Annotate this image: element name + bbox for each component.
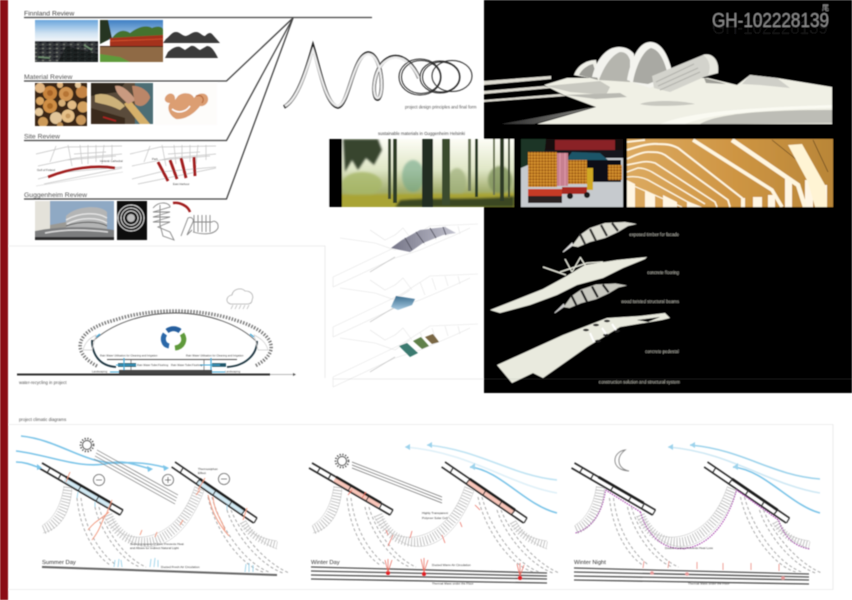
- map: gulf of Finland wind: Gulf of Finland: [37, 168, 56, 172]
- labels: structural layers: concrete flooring: [647, 270, 680, 275]
- red side bar: [0, 0, 8, 600]
- daylight windows: [627, 178, 827, 207]
- air cavity: cyan: [63, 477, 245, 515]
- panel: structural axonometrics: [333, 222, 670, 387]
- wind arrows: [668, 442, 820, 513]
- panel: Guggenheim review: [24, 192, 218, 240]
- labels: water system: Landscaping: [225, 370, 241, 374]
- icon: recycle symbol: [163, 329, 184, 348]
- section: rain collection shell: [80, 311, 271, 370]
- photo: wood shavings: [155, 83, 217, 125]
- labels: summer: Semi-transparent Fabric Prevents Heat: [130, 542, 184, 546]
- icon: black mountain pattern: [163, 32, 220, 58]
- fresh air arrows: blue: [77, 492, 253, 572]
- caption: climatic diagrams: project climatic diagrams: [19, 417, 66, 422]
- left white strips: [484, 76, 566, 102]
- shells: [574, 60, 600, 80]
- labels: structural layers: wood twisted structural beams: [621, 299, 679, 304]
- icon: sun: [336, 454, 348, 468]
- main slab: [537, 75, 832, 124]
- heading: Site Review: Site Review: [24, 134, 60, 140]
- photo: red waterfront houses: [100, 20, 163, 62]
- labels: winter day: Winter Day: [311, 560, 340, 566]
- panel: Winter Night diagram: [572, 442, 822, 586]
- icon: rain cloud: [227, 289, 253, 309]
- sun rays: [352, 462, 442, 503]
- map: east harbour wind: [130, 145, 216, 186]
- icon: spiral form diagram: [284, 47, 472, 107]
- axon: blue glazed volume: [333, 274, 478, 337]
- diagram line: review tree: [24, 18, 372, 199]
- caption: sustainable materials: sustainable materials in Guggenheim Helsinki: [378, 131, 465, 136]
- labels: structural layers: concrete pedestal: [645, 349, 679, 354]
- panel: black background: [484, 0, 852, 393]
- watermark: project code: 尾: [822, 4, 829, 12]
- icon: sun: [80, 438, 94, 452]
- photo: city panorama: [35, 20, 98, 62]
- labels: winter night: [574, 546, 729, 586]
- panel: Summer Day diagram: [16, 436, 289, 575]
- labels: winter day: Ducted Warm Air Circulation: [432, 563, 471, 567]
- labels: structural layers: [599, 232, 680, 384]
- axon: timber facade layer: [563, 222, 637, 252]
- panel: Finnland review: [24, 10, 220, 62]
- labels: water system: Rain Water Utilisation for Cleaning and Irrigation: [100, 354, 158, 358]
- labels: structural layers: exposed timber for facade: [629, 232, 680, 237]
- floor thermal mass: [574, 568, 809, 584]
- axon: wood twisted beams layer: [555, 284, 627, 313]
- section: ground line with arrow: [17, 370, 296, 376]
- wind arrows: [405, 442, 557, 513]
- photo: timber ceiling: [627, 139, 833, 207]
- map: gulf of Finland wind: Helsinki Cathedral: [100, 159, 123, 163]
- photo: Guggenheim museum: [35, 201, 114, 240]
- floor slab: [42, 567, 277, 575]
- ridge: [742, 75, 790, 88]
- photo: log ends: [35, 82, 88, 128]
- labels: water system: Rain Water Toilet Flushing: [171, 363, 203, 367]
- photo: spiral ceiling: [117, 201, 147, 240]
- axon: concrete flooring layer: [490, 257, 647, 313]
- labels: summer: Thermosiphon: [198, 467, 218, 471]
- watermark: project code: GH-102228139: [712, 17, 828, 39]
- caption: water recycling: water-recycling in project: [19, 380, 67, 385]
- map: gulf of Finland wind: [36, 145, 123, 186]
- labels: winter night: Double Ceiling Prevents Heat Loss: [665, 546, 713, 550]
- grey wedge: [501, 107, 594, 124]
- panel: Site review: [24, 134, 216, 186]
- heat flows: orange: [66, 472, 247, 540]
- labels: winter night: Winter Night: [574, 560, 606, 566]
- watermark: project code: [712, 4, 829, 39]
- labels: water system: [92, 354, 244, 374]
- render: building exterior: [484, 42, 832, 124]
- caption: project design principles: project design principles and final form: [405, 104, 477, 110]
- map: east harbour wind: Park: [152, 157, 158, 161]
- photo: forest: [326, 139, 514, 207]
- labels: water system: Rain Water Toilet Flushing: [137, 363, 169, 367]
- panel: water recycling: [9, 246, 325, 385]
- axon: green floor plates: [333, 324, 478, 387]
- sun rays: [94, 450, 178, 504]
- slab shading: [546, 81, 610, 95]
- labels: water system: Landscaping: [92, 370, 108, 374]
- labels: winter day: [311, 511, 473, 586]
- icon: spiral principle sketch: [153, 203, 218, 240]
- wind arrows: [16, 436, 169, 472]
- watermark: project code: GH-102228139: [712, 10, 829, 32]
- labels: winter day: Thermal Mass under the Floor: [432, 582, 473, 586]
- panel: Winter Day diagram: [309, 442, 559, 586]
- icon: minus: [94, 474, 104, 486]
- icon: plus: [162, 474, 174, 486]
- map: east harbour wind: East Harbour: [173, 182, 190, 186]
- section: water tanks and pipes: [96, 334, 254, 372]
- heading: Material Review: Material Review: [24, 74, 72, 81]
- axon: concrete pedestal layer: [497, 313, 670, 383]
- heat dots and arrows: [650, 571, 785, 580]
- floor thermal mass: [311, 567, 547, 583]
- heading: Guggenheim Review: Guggenheim Review: [24, 192, 87, 199]
- labels: water system: Rain Water Utilisation for Cleaning and Irrigation: [186, 354, 244, 358]
- labels: structural layers: construction solution and structural system: [599, 380, 680, 384]
- icon: minus right: [218, 474, 230, 484]
- heading: Finnland Review: Finnland Review: [24, 10, 74, 18]
- labels: summer: [42, 467, 218, 569]
- red heat dots: [386, 571, 522, 580]
- labels: summer: Summer Day: [42, 560, 76, 566]
- photo: timber truck: [521, 139, 623, 207]
- labels: summer: and Allows for Indirect Natural Light: [130, 546, 179, 550]
- labels: summer: Effect: [198, 471, 206, 475]
- warm air arrows: [348, 490, 524, 576]
- labels: winter night: Thermal Mass under the Floor: [688, 582, 729, 586]
- roll tube: [652, 54, 718, 92]
- labels: winter day: Polymer Solar Cell: [422, 516, 448, 520]
- lower right grey: [700, 110, 832, 124]
- panel: Material review: [24, 74, 217, 128]
- photo: carpenter hands: [91, 83, 153, 124]
- axon: timber shell: [333, 224, 478, 287]
- icon: moon: [615, 450, 629, 471]
- labels: winter day: Highly Transparent: [422, 511, 448, 515]
- labels: summer: Ducted Fresh Air Circulation: [161, 565, 200, 569]
